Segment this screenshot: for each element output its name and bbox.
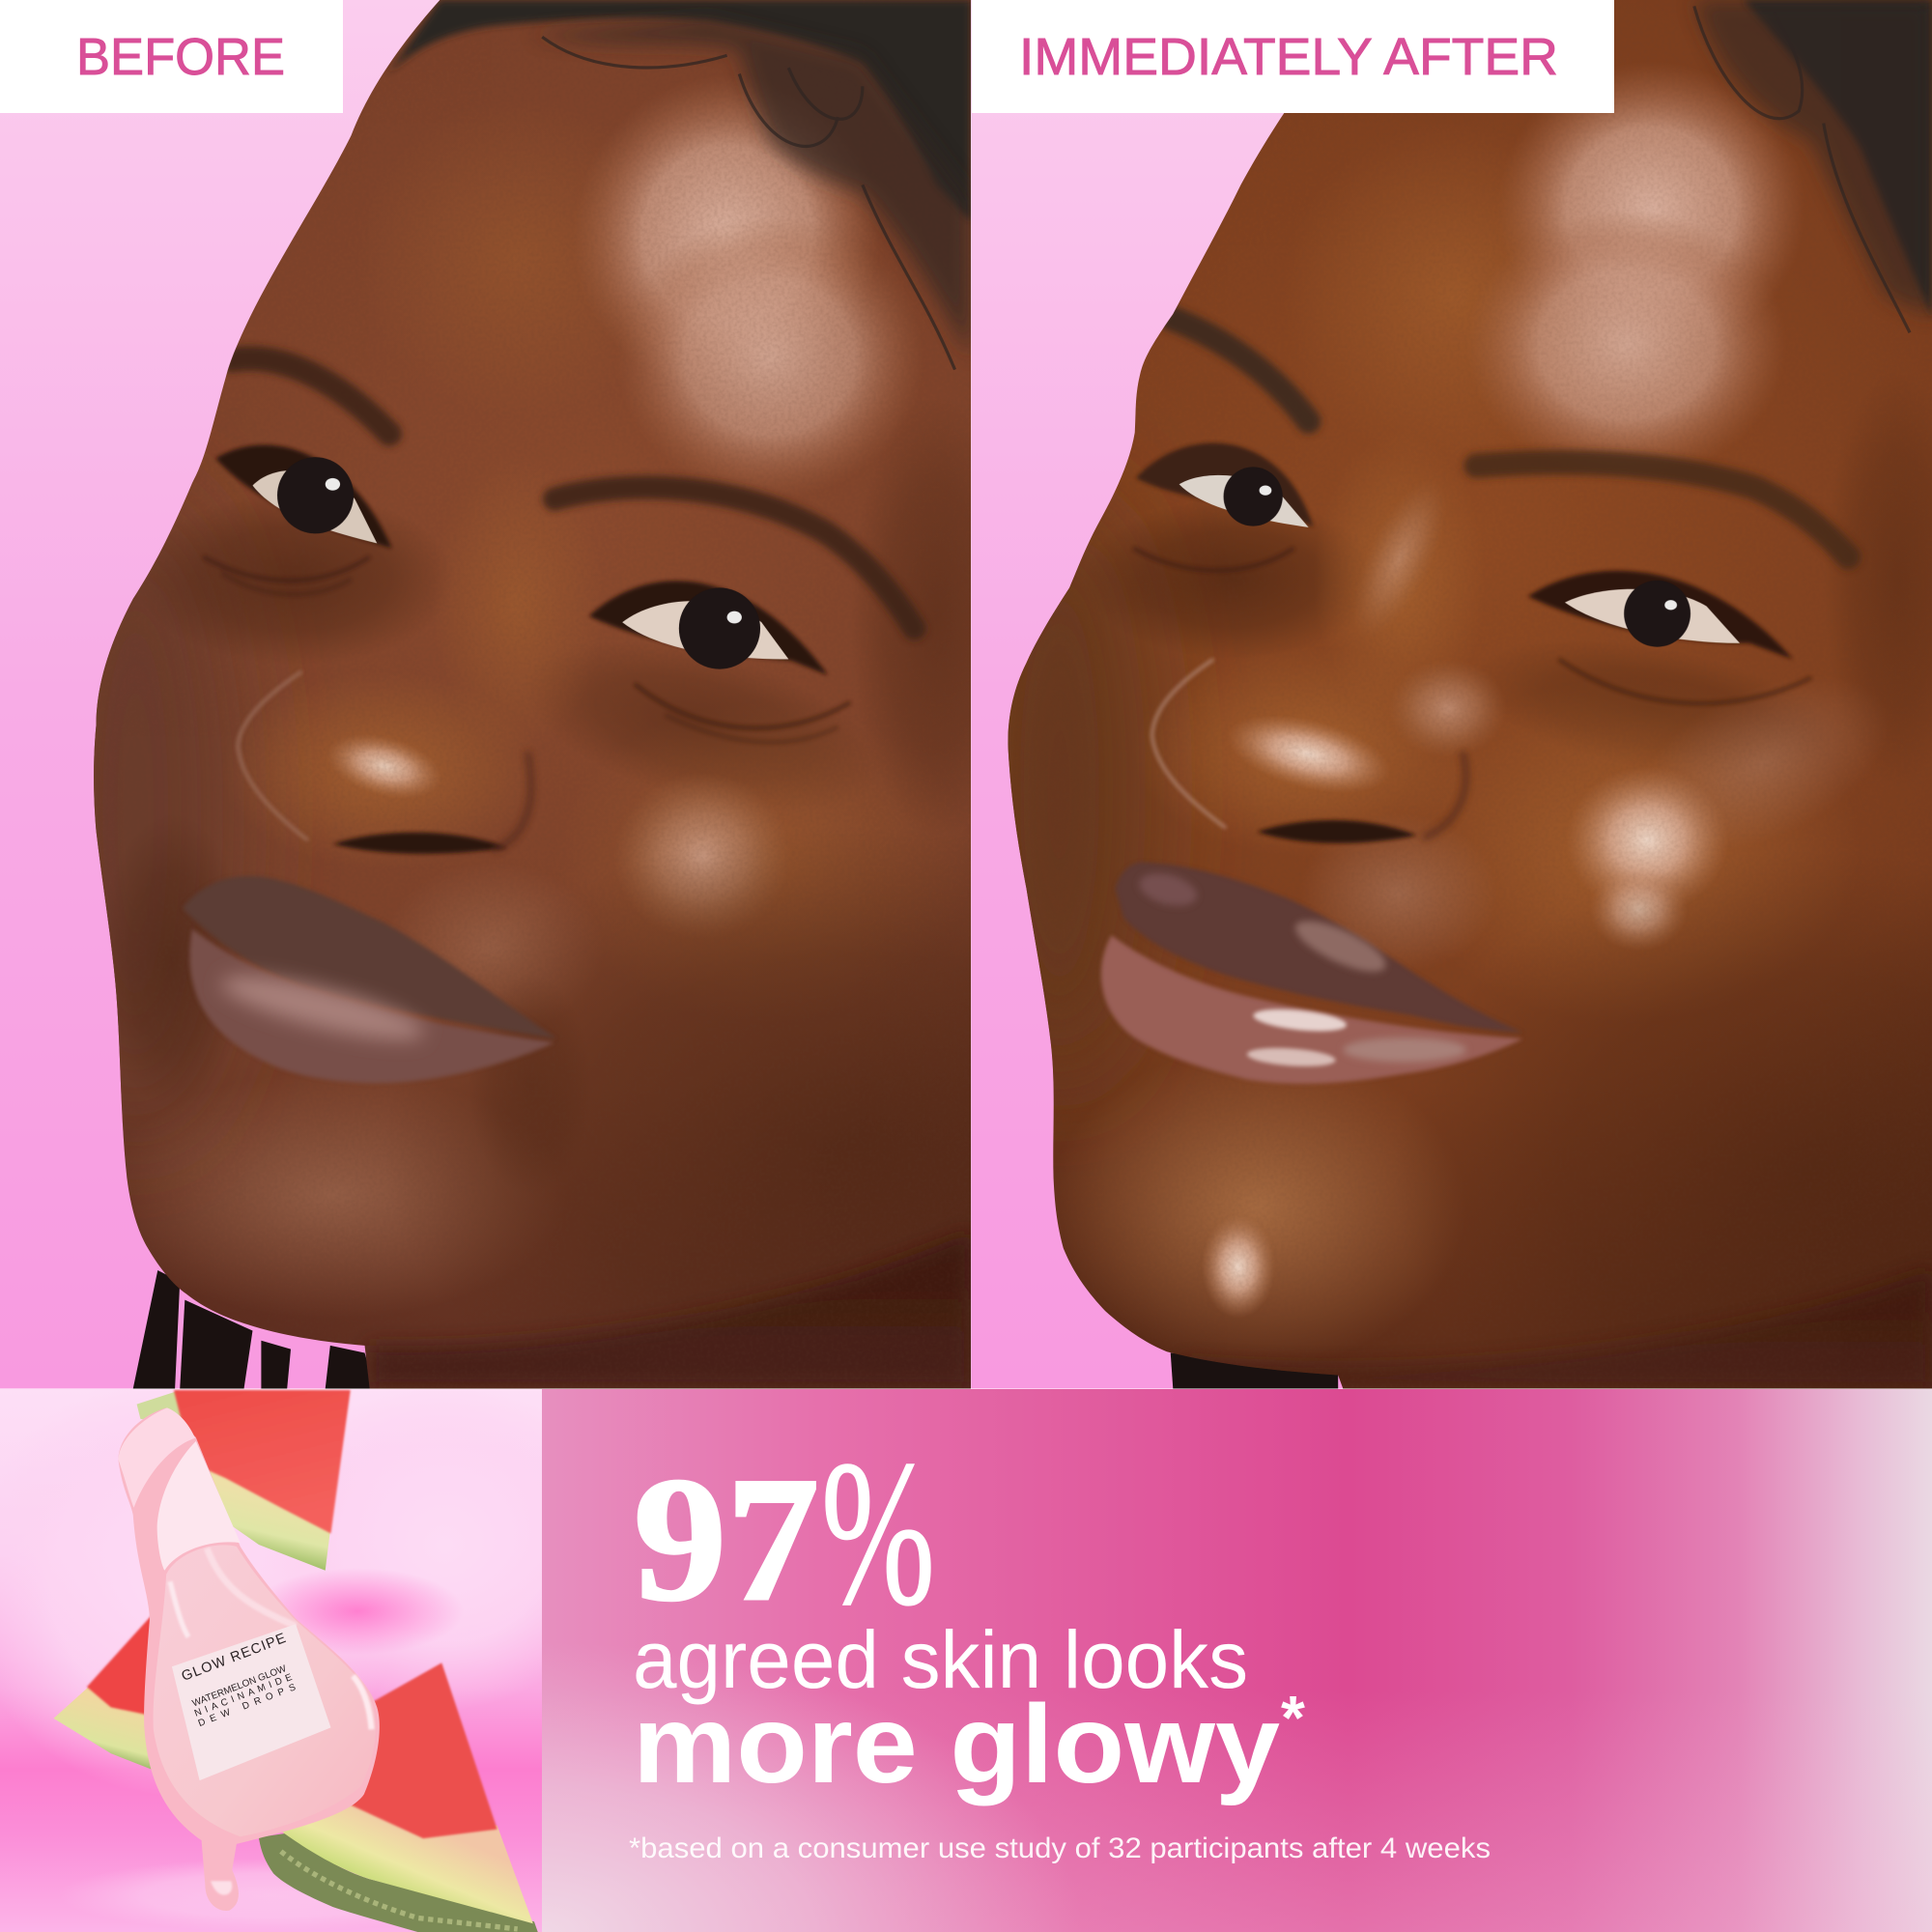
claim line one: agreed skin looks	[633, 1614, 1248, 1705]
hair before	[388, 0, 971, 370]
pink background left	[0, 0, 440, 1389]
statistic 97%: %	[821, 1417, 935, 1648]
bottle label: GLOW RECIPE	[180, 1631, 289, 1685]
watermelon slice top	[137, 1390, 351, 1571]
panel: before photo	[0, 0, 971, 1389]
bottle label	[172, 1624, 330, 1780]
gradient background	[542, 1389, 1932, 1932]
panel: product image	[0, 1372, 618, 1932]
bottle	[118, 1407, 380, 1911]
statistic 97%	[634, 1417, 935, 1648]
right eye before	[589, 581, 850, 742]
face shape after	[971, 0, 1932, 1491]
asterisk: *	[1281, 1683, 1305, 1752]
left eye before	[203, 445, 392, 594]
lips before	[183, 876, 557, 1083]
footnote: *based on a consumer use study of 32 participants after 4 weeks	[629, 1833, 1491, 1864]
panel: immediately after photo	[971, 0, 1932, 1491]
nose after	[1152, 659, 1465, 843]
brows before	[232, 358, 914, 629]
claim line two: more glowy	[633, 1683, 1280, 1806]
statistic 97%: 97	[634, 1440, 819, 1637]
label: before	[0, 0, 343, 113]
pink backdrop	[0, 1372, 618, 1932]
right eye after	[1528, 571, 1811, 703]
face shape before	[94, 0, 971, 1389]
braids after	[1171, 1353, 1338, 1388]
panel: claim	[542, 1389, 1932, 1932]
nose before	[238, 671, 531, 854]
bottle label: NIACINAMIDE	[193, 1671, 298, 1719]
watermelon slice right	[259, 1662, 538, 1932]
left eye after	[1133, 443, 1314, 571]
label: immediately after: IMMEDIATELY AFTER	[1019, 28, 1558, 86]
hair after	[1694, 0, 1932, 332]
lips after	[1101, 862, 1523, 1084]
bottle label: WATERMELON GLOW	[191, 1663, 289, 1709]
label: immediately after	[972, 0, 1614, 113]
label: before: BEFORE	[76, 28, 285, 86]
bottle label: DEW DROPS	[197, 1680, 302, 1729]
watermelon slice left	[53, 1611, 156, 1771]
pink background right	[971, 0, 1343, 1389]
braids behind neck	[133, 1270, 375, 1388]
brows after	[1171, 318, 1848, 557]
